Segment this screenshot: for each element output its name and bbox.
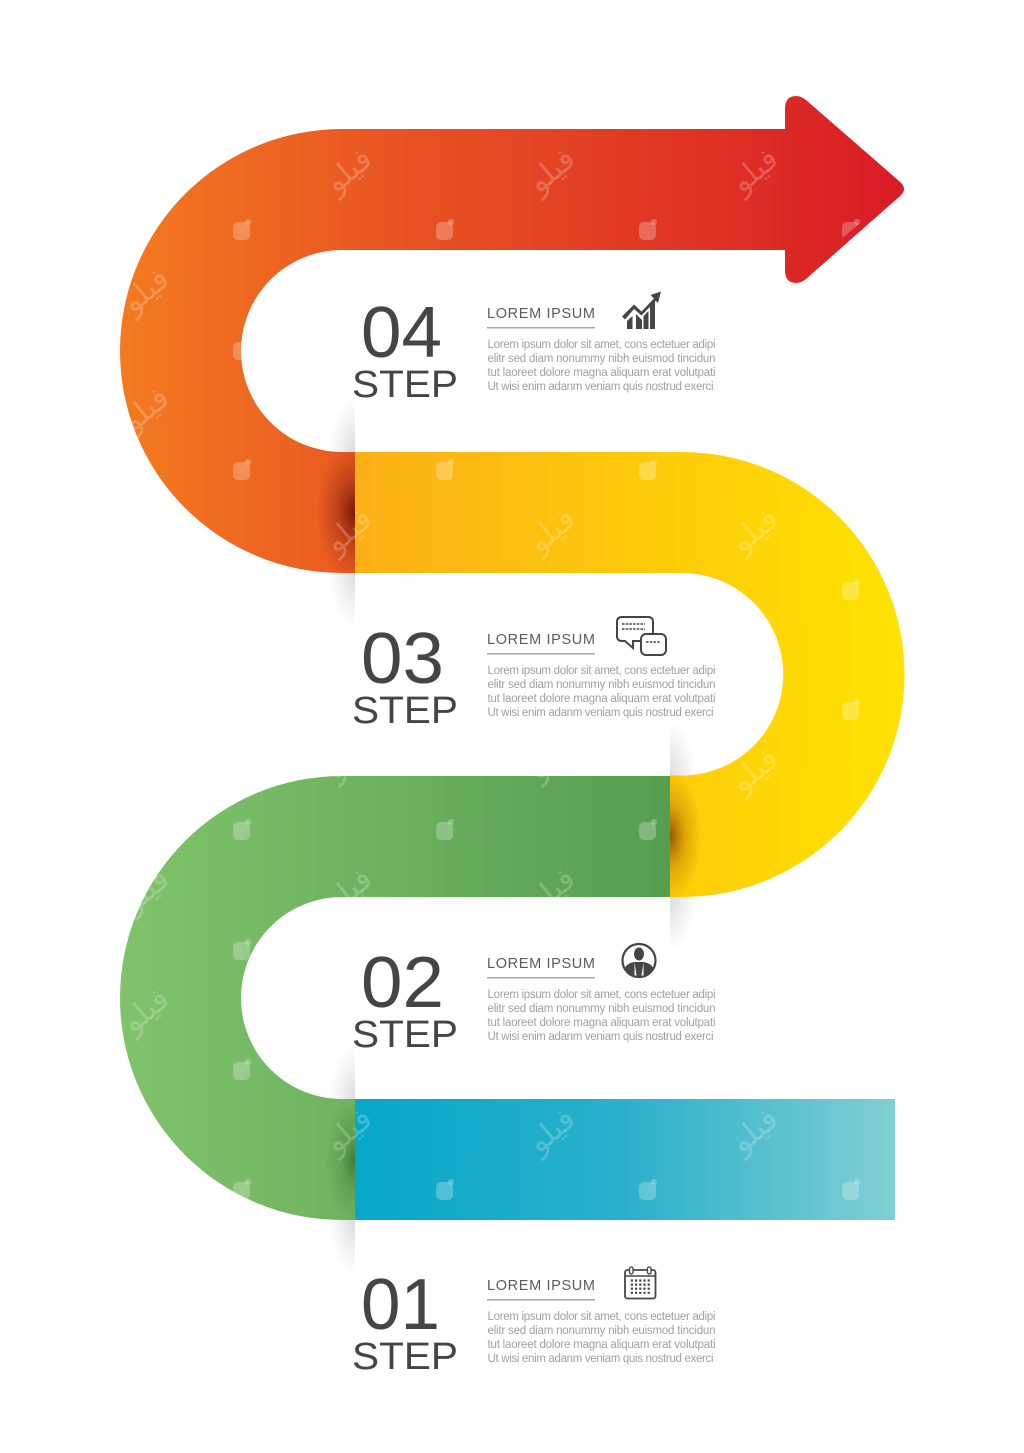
watermarks: فیلو	[722, 1101, 786, 1162]
icon: chat bubbles	[617, 617, 666, 655]
step 01 body text: Lorem ipsum dolor sit amet, cons ectetuer adipi	[488, 1311, 716, 1323]
step 02 body text: tut laoreet dolore magna aliquam erat volutpati	[488, 1017, 716, 1029]
step 02 body text	[488, 989, 716, 1043]
step 03 label: STEP	[352, 690, 458, 732]
panel: step 02	[352, 943, 716, 1056]
watermarks: فیلو	[316, 728, 380, 789]
step 04 label: STEP	[352, 364, 458, 406]
watermarks: فیلو	[519, 1101, 583, 1162]
step 02 label: STEP	[352, 1014, 458, 1056]
watermarks: فیلو	[519, 501, 583, 562]
band: green curve, step 02	[120, 776, 670, 1226]
step 03 body text	[488, 665, 716, 719]
panel: step 01	[352, 1265, 716, 1378]
watermarks	[113, 141, 860, 1200]
step 01 body text	[488, 1311, 716, 1365]
step 01 body text: tut laoreet dolore magna aliquam erat volutpati	[488, 1339, 716, 1351]
step 02 body text: elitr sed diam nonummy nibh euismod tincidun	[488, 1003, 716, 1015]
step 02 body text: Lorem ipsum dolor sit amet, cons ectetuer adipi	[488, 989, 716, 1001]
icon: calendar	[625, 1267, 656, 1298]
icon: growth chart	[622, 292, 661, 329]
step 01 label: STEP	[352, 1336, 458, 1378]
step 02 number: 02	[361, 943, 444, 1023]
step 04 body text: Ut wisi enim adanm veniam quis nostrud exerci	[488, 381, 714, 393]
watermarks: فیلو	[113, 861, 177, 922]
step 03 number: 03	[361, 619, 444, 699]
step 04 body text: elitr sed diam nonummy nibh euismod tincidun	[488, 353, 716, 365]
step 03 heading: LOREM IPSUM	[487, 632, 595, 648]
step 03 body text: Ut wisi enim adanm veniam quis nostrud exerci	[488, 707, 714, 719]
watermarks: فیلو	[316, 141, 380, 202]
step 01 heading: LOREM IPSUM	[487, 1278, 595, 1294]
watermarks: فیلو	[316, 1101, 380, 1162]
step 04 body text	[488, 339, 716, 393]
watermarks: فیلو	[113, 380, 177, 441]
watermarks: فیلو	[722, 141, 786, 202]
watermarks: فیلو	[519, 861, 583, 922]
step 03 body text: elitr sed diam nonummy nibh euismod tincidun	[488, 679, 716, 691]
watermarks: فیلو	[316, 501, 380, 562]
step 03 body text: tut laoreet dolore magna aliquam erat volutpati	[488, 693, 716, 705]
step 03 body text: Lorem ipsum dolor sit amet, cons ectetuer adipi	[488, 665, 716, 677]
step 04 number: 04	[361, 293, 442, 373]
watermarks: فیلو	[113, 981, 177, 1042]
band: orange-red arrow, step 04	[120, 96, 904, 580]
band: yellow curve, step 03	[355, 452, 904, 902]
watermarks: فیلو	[519, 141, 583, 202]
watermarks: فیلو	[316, 861, 380, 922]
step 02 heading: LOREM IPSUM	[487, 956, 595, 972]
watermarks: فیلو	[519, 728, 583, 789]
step 01 body text: Ut wisi enim adanm veniam quis nostrud exerci	[488, 1353, 714, 1365]
watermarks: فیلو	[113, 261, 177, 322]
panel: step 04	[352, 292, 716, 406]
band: blue bar, step 01	[355, 1099, 895, 1220]
step 04 heading: LOREM IPSUM	[487, 306, 595, 322]
step 04 body text: tut laoreet dolore magna aliquam erat volutpati	[488, 367, 716, 379]
step 02 body text: Ut wisi enim adanm veniam quis nostrud exerci	[488, 1031, 714, 1043]
step 04 body text: Lorem ipsum dolor sit amet, cons ectetuer adipi	[488, 339, 716, 351]
watermarks: فیلو	[722, 501, 786, 562]
icon: businessman portrait	[622, 944, 656, 977]
step 01 body text: elitr sed diam nonummy nibh euismod tincidun	[488, 1325, 716, 1337]
watermarks: فیلو	[722, 741, 786, 802]
step 01 number: 01	[361, 1265, 440, 1345]
panel: step 03	[352, 617, 716, 732]
